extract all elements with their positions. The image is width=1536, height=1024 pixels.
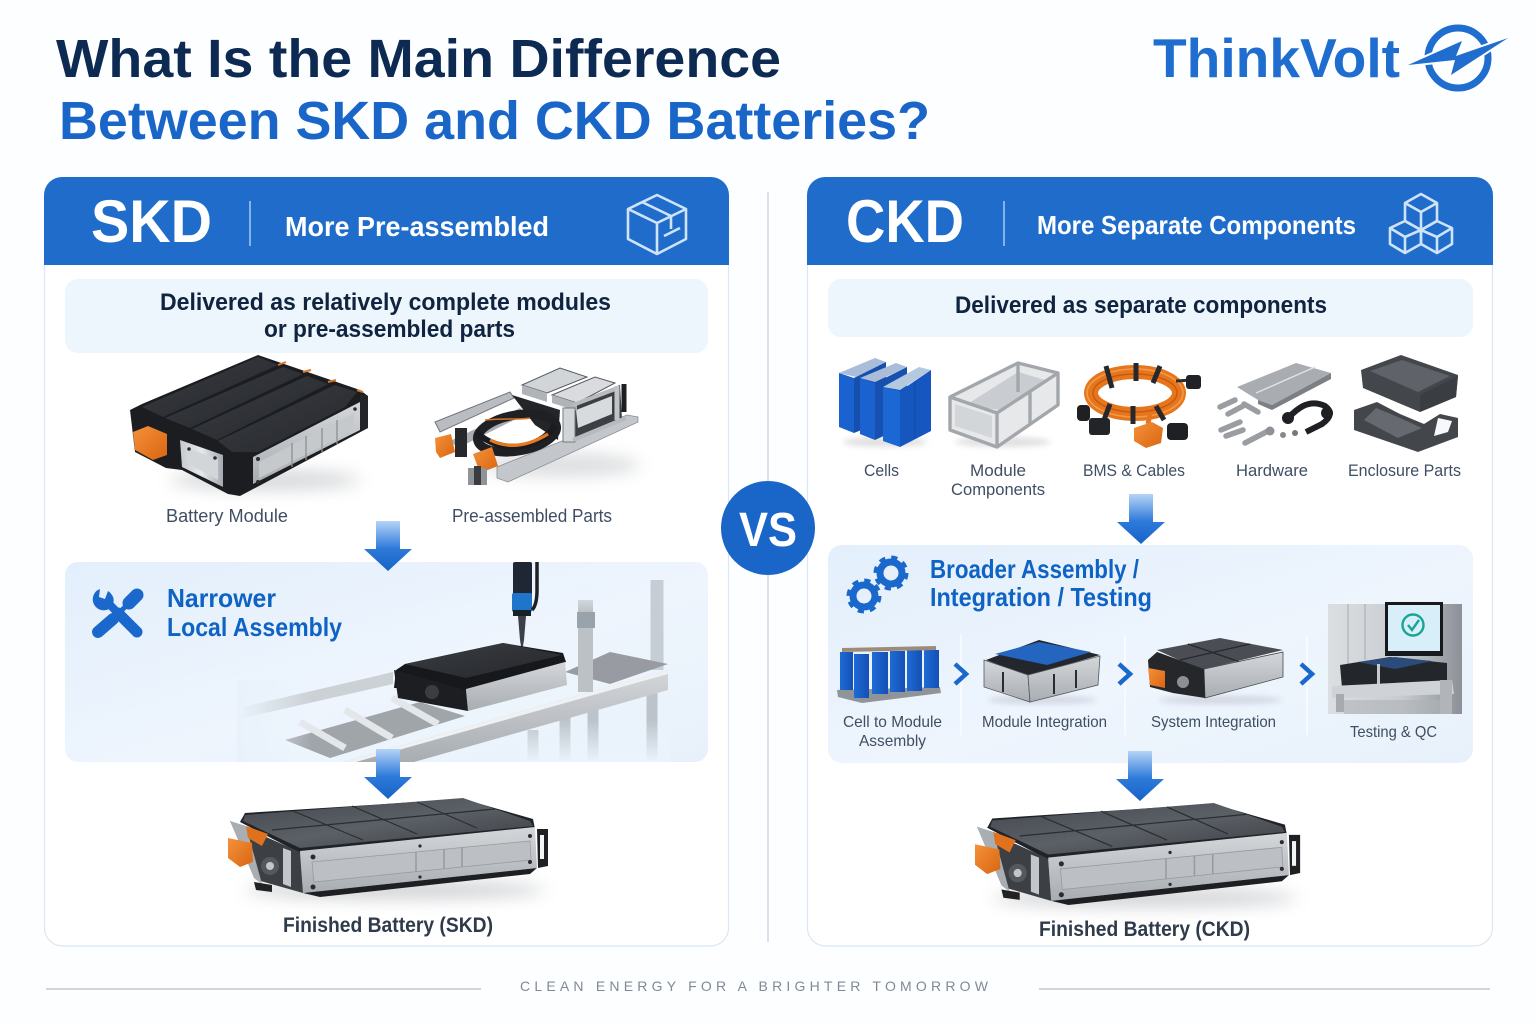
SKD heading: SKD (91, 188, 212, 255)
label: cell to module assembly: Assembly (859, 733, 926, 750)
component: enclosure parts (1354, 355, 1458, 452)
title: Between SKD and CKD Batteries? (59, 91, 930, 151)
SKD subheading: More Pre-assembled (285, 211, 549, 242)
logo: ThinkVolt (1153, 27, 1508, 89)
label: pre-assembled parts: Pre-assembled Parts (452, 506, 612, 526)
title: What Is the Main Difference (56, 29, 781, 89)
label: module components: Module (970, 461, 1026, 480)
label: BMS and cables: BMS & Cables (1083, 461, 1185, 480)
panel: narrower local assembly (65, 562, 708, 762)
icon: stacked cubes (1390, 194, 1452, 253)
label: cell to module assembly: Cell to Module (843, 714, 942, 731)
arrow: down to assembly (1117, 494, 1165, 544)
step: testing and QC (1328, 602, 1462, 714)
heading: narrower local assembly: Narrower (167, 583, 276, 613)
image: battery module (130, 355, 368, 496)
component: module frame (950, 363, 1058, 447)
panel: narrower local assembly: Local Assembly (167, 612, 342, 642)
component: hardware (1220, 363, 1333, 443)
panel: broader assembly: Integration / Testing (930, 582, 1152, 612)
CKD heading: CKD (846, 188, 964, 255)
label: battery module: Battery Module (166, 506, 288, 526)
image: finished battery SKD (228, 798, 548, 899)
footer tagline: CLEAN ENERGY FOR A BRIGHTER TOMORROW (520, 978, 989, 994)
panel: broader assembly (828, 545, 1473, 763)
image: pre-assembled parts (435, 368, 640, 485)
arrow: down to finished (1116, 751, 1164, 801)
panel: SKD (44, 177, 729, 946)
image: finished battery CKD (975, 803, 1300, 907)
VS badge (721, 481, 815, 575)
CKD description box: Delivered as separate components (955, 292, 1327, 319)
image: assembly line (237, 562, 670, 762)
label: module components (951, 461, 1045, 499)
chevron (955, 664, 966, 684)
label: cells: Cells (864, 461, 899, 480)
arrow: down to finished (364, 749, 412, 799)
SKD panel body (44, 200, 728, 946)
label: finished battery CKD: Finished Battery (CKD) (1039, 918, 1250, 941)
VS badge: VS (739, 504, 797, 557)
label: testing and QC: Testing & QC (1350, 724, 1437, 741)
component: BMS and cables (1077, 363, 1201, 448)
arrow: down to assembly (364, 521, 412, 571)
CKD description box (828, 279, 1473, 337)
title (56, 29, 930, 151)
SKD header band (44, 177, 729, 265)
label: cell to module assembly (843, 714, 942, 750)
CKD header band (807, 177, 1493, 265)
icon: open box (628, 195, 686, 254)
CKD panel body (808, 200, 1492, 946)
label: finished battery SKD: Finished Battery (SKD) (283, 914, 493, 937)
label: module integration: Module Integration (982, 714, 1107, 731)
label: module components: Components (951, 480, 1045, 499)
logo: ThinkVolt: ThinkVolt (1153, 27, 1400, 89)
chevron (1119, 664, 1130, 684)
panel: CKD (807, 177, 1493, 946)
heading: broader assembly: Broader Assembly / (930, 554, 1139, 584)
chevron (1301, 664, 1312, 684)
component: cells (839, 358, 931, 447)
label: hardware: Hardware (1236, 461, 1308, 480)
step: cell to module (837, 648, 941, 703)
label: system integration: System Integration (1151, 714, 1276, 731)
SKD description box: or pre-assembled parts (264, 316, 515, 343)
label: enclosure parts: Enclosure Parts (1348, 461, 1461, 480)
step: module integration (984, 640, 1100, 704)
CKD subheading: More Separate Components (1037, 210, 1356, 240)
SKD description box (65, 279, 708, 353)
step: system integration (1148, 638, 1283, 704)
centre divider (767, 192, 769, 942)
icon: gears (849, 558, 906, 611)
SKD description box: Delivered as relatively complete modules (160, 289, 611, 316)
icon: wrench and screwdriver (93, 589, 137, 632)
